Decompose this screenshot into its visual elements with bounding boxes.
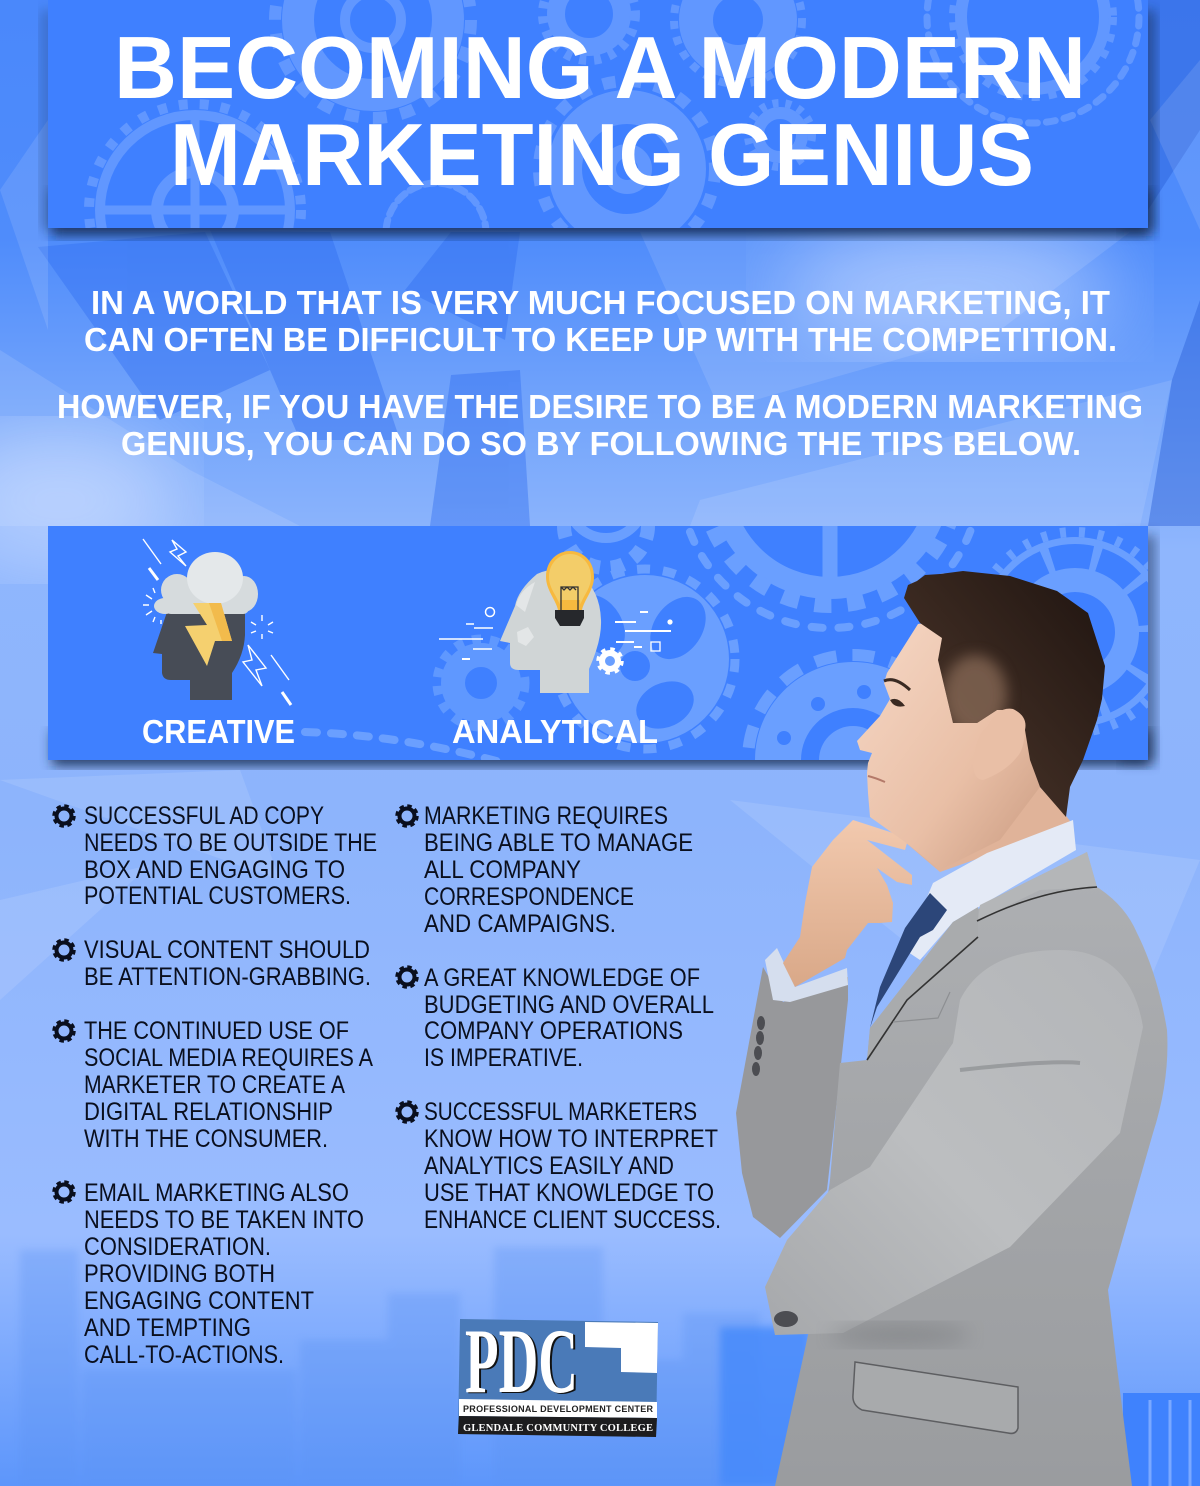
neck bbox=[905, 740, 1073, 872]
bullet list: creative: BE ATTENTION-GRABBING. bbox=[84, 963, 371, 991]
bullet list: analytical: COMPANY OPERATIONS bbox=[424, 1017, 683, 1045]
panel shadows bbox=[40, 10, 1156, 766]
bullet list: analytical: ALL COMPANY bbox=[424, 856, 581, 884]
bullet list: analytical: IS IMPERATIVE. bbox=[424, 1044, 583, 1072]
banner gears bbox=[84, 0, 1142, 228]
intro text: GENIUS, YOU CAN DO SO BY FOLLOWING THE TIPS BELOW. bbox=[121, 425, 1081, 462]
logo: PDC: PDC bbox=[465, 1310, 578, 1412]
bullet list: analytical bbox=[397, 802, 721, 1234]
bullet list: analytical: SUCCESSFUL MARKETERS bbox=[424, 1098, 697, 1126]
bullet list: analytical: ENHANCE CLIENT SUCCESS. bbox=[424, 1206, 721, 1234]
intro text: IN A WORLD THAT IS VERY MUCH FOCUSED ON MARKETING, IT bbox=[91, 284, 1110, 321]
panel: creative and analytical bbox=[48, 526, 1148, 760]
bullet list: creative: BOX AND ENGAGING TO bbox=[84, 856, 345, 884]
logo: PDC: PDC bbox=[467, 1311, 580, 1413]
raised sleeve bbox=[736, 967, 848, 1238]
bullet list: creative: NEEDS TO BE TAKEN INTO bbox=[84, 1206, 364, 1234]
bullet list: creative: AND TEMPTING bbox=[84, 1314, 251, 1342]
bullet list: creative: CONSIDERATION. bbox=[84, 1233, 271, 1261]
title: BECOMING A MODERN bbox=[114, 18, 1086, 117]
lapel and collar bbox=[867, 907, 978, 1060]
bullet list: creative: ENGAGING CONTENT bbox=[84, 1287, 314, 1315]
bullet list: creative: VISUAL CONTENT SHOULD bbox=[84, 936, 370, 964]
bullet list: creative: MARKETER TO CREATE A bbox=[84, 1071, 345, 1099]
hand bbox=[783, 820, 912, 987]
heading: creative: CREATIVE bbox=[142, 713, 295, 750]
bullet list: analytical: KNOW HOW TO INTERPRET bbox=[424, 1125, 718, 1153]
title: MARKETING GENIUS bbox=[170, 105, 1034, 204]
bullet list: creative: NEEDS TO BE OUTSIDE THE bbox=[84, 829, 377, 857]
bullet list: creative: EMAIL MARKETING ALSO bbox=[84, 1179, 349, 1207]
panel gears bbox=[301, 526, 1148, 760]
bullet list: analytical: AND CAMPAIGNS. bbox=[424, 910, 616, 938]
bullet list: analytical: CORRESPONDENCE bbox=[424, 883, 634, 911]
pocket flap bbox=[853, 1362, 1018, 1433]
icon: creative head with storm cloud bbox=[143, 539, 291, 705]
bullet list: creative: SUCCESSFUL AD COPY bbox=[84, 802, 324, 830]
panel: title banner bbox=[48, 0, 1148, 228]
ear bbox=[973, 709, 1026, 780]
hair bbox=[904, 571, 1105, 817]
tie bbox=[870, 893, 947, 1028]
bullet list: creative: CALL-TO-ACTIONS. bbox=[84, 1341, 284, 1369]
cuff bbox=[765, 948, 848, 1002]
intro text bbox=[57, 284, 1143, 462]
forearm bbox=[765, 950, 1143, 1335]
bullet list: analytical: A GREAT KNOWLEDGE OF bbox=[424, 964, 700, 992]
bullet list: analytical: ANALYTICS EASILY AND bbox=[424, 1152, 674, 1180]
buttons bbox=[752, 1016, 798, 1327]
bullet list: creative: SOCIAL MEDIA REQUIRES A bbox=[84, 1044, 373, 1072]
bullet list: creative: DIGITAL RELATIONSHIP bbox=[84, 1098, 333, 1126]
bullet list: analytical: BEING ABLE TO MANAGE bbox=[424, 829, 693, 857]
heading: analytical: ANALYTICAL bbox=[452, 713, 658, 750]
jacket body bbox=[775, 852, 1167, 1486]
bullet list: creative bbox=[54, 802, 377, 1369]
icon: analytical head with light bulb bbox=[439, 551, 673, 693]
shirt bbox=[905, 820, 1076, 960]
logo: PDC: GLENDALE COMMUNITY COLLEGE bbox=[463, 1423, 653, 1434]
intro text: HOWEVER, IF YOU HAVE THE DESIRE TO BE A MODERN MARKETING bbox=[57, 388, 1143, 425]
bullet list: creative: PROVIDING BOTH bbox=[84, 1260, 275, 1288]
logo: PDC: PROFESSIONAL DEVELOPMENT CENTER bbox=[463, 1404, 654, 1414]
bullet list: analytical: BUDGETING AND OVERALL bbox=[424, 991, 714, 1019]
photo: thinking businessman bbox=[736, 571, 1167, 1486]
bullet list: creative: POTENTIAL CUSTOMERS. bbox=[84, 882, 351, 910]
bullet list: creative: THE CONTINUED USE OF bbox=[84, 1017, 349, 1045]
bullet list: analytical: MARKETING REQUIRES bbox=[424, 802, 668, 830]
bullet list: creative: WITH THE CONSUMER. bbox=[84, 1125, 328, 1153]
bullet list: analytical: USE THAT KNOWLEDGE TO bbox=[424, 1179, 714, 1207]
intro text: CAN OFTEN BE DIFFICULT TO KEEP UP WITH THE COMPETITION. bbox=[84, 321, 1117, 358]
title bbox=[114, 18, 1086, 204]
face bbox=[857, 620, 1040, 870]
